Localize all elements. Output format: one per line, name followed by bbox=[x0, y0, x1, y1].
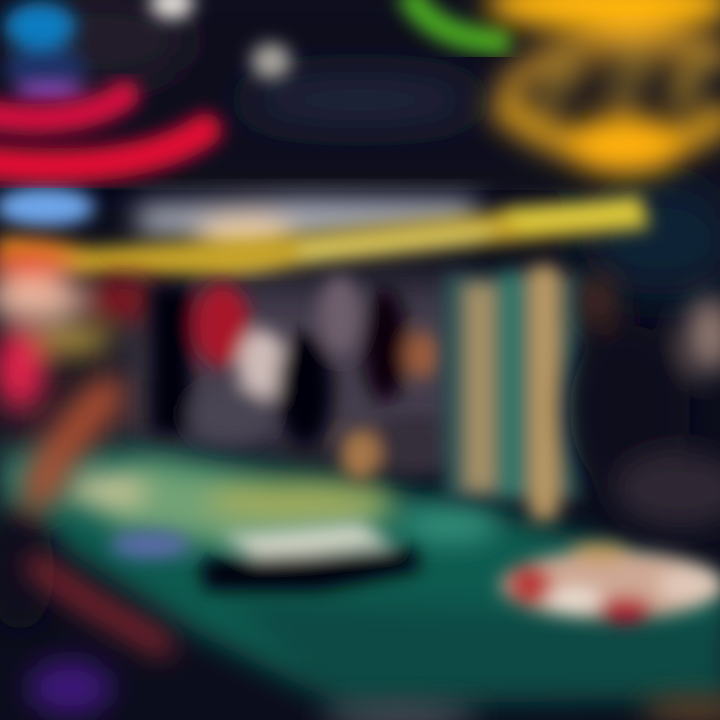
left stall: red and pink bbox=[0, 246, 158, 410]
black tray with white top bbox=[110, 522, 420, 590]
red neon arcs bbox=[0, 95, 205, 166]
green neon arc bbox=[408, 0, 510, 42]
man on right bbox=[570, 272, 720, 528]
raised arm bbox=[0, 395, 105, 630]
table: green felt bbox=[0, 445, 720, 705]
pale banner bbox=[135, 198, 480, 262]
yellow banner bbox=[0, 195, 650, 275]
crowd: dark figures bbox=[150, 275, 465, 481]
poker chips bbox=[500, 542, 720, 623]
table: light felt area bbox=[65, 460, 500, 545]
white lights bbox=[150, 0, 291, 79]
columns: tan and green stripes bbox=[445, 265, 580, 520]
background: upper room bbox=[0, 0, 720, 470]
table edge: red rail and dark foreground bbox=[28, 560, 720, 720]
left blue sign bbox=[0, 2, 95, 227]
golden crown sign bbox=[485, 0, 720, 175]
